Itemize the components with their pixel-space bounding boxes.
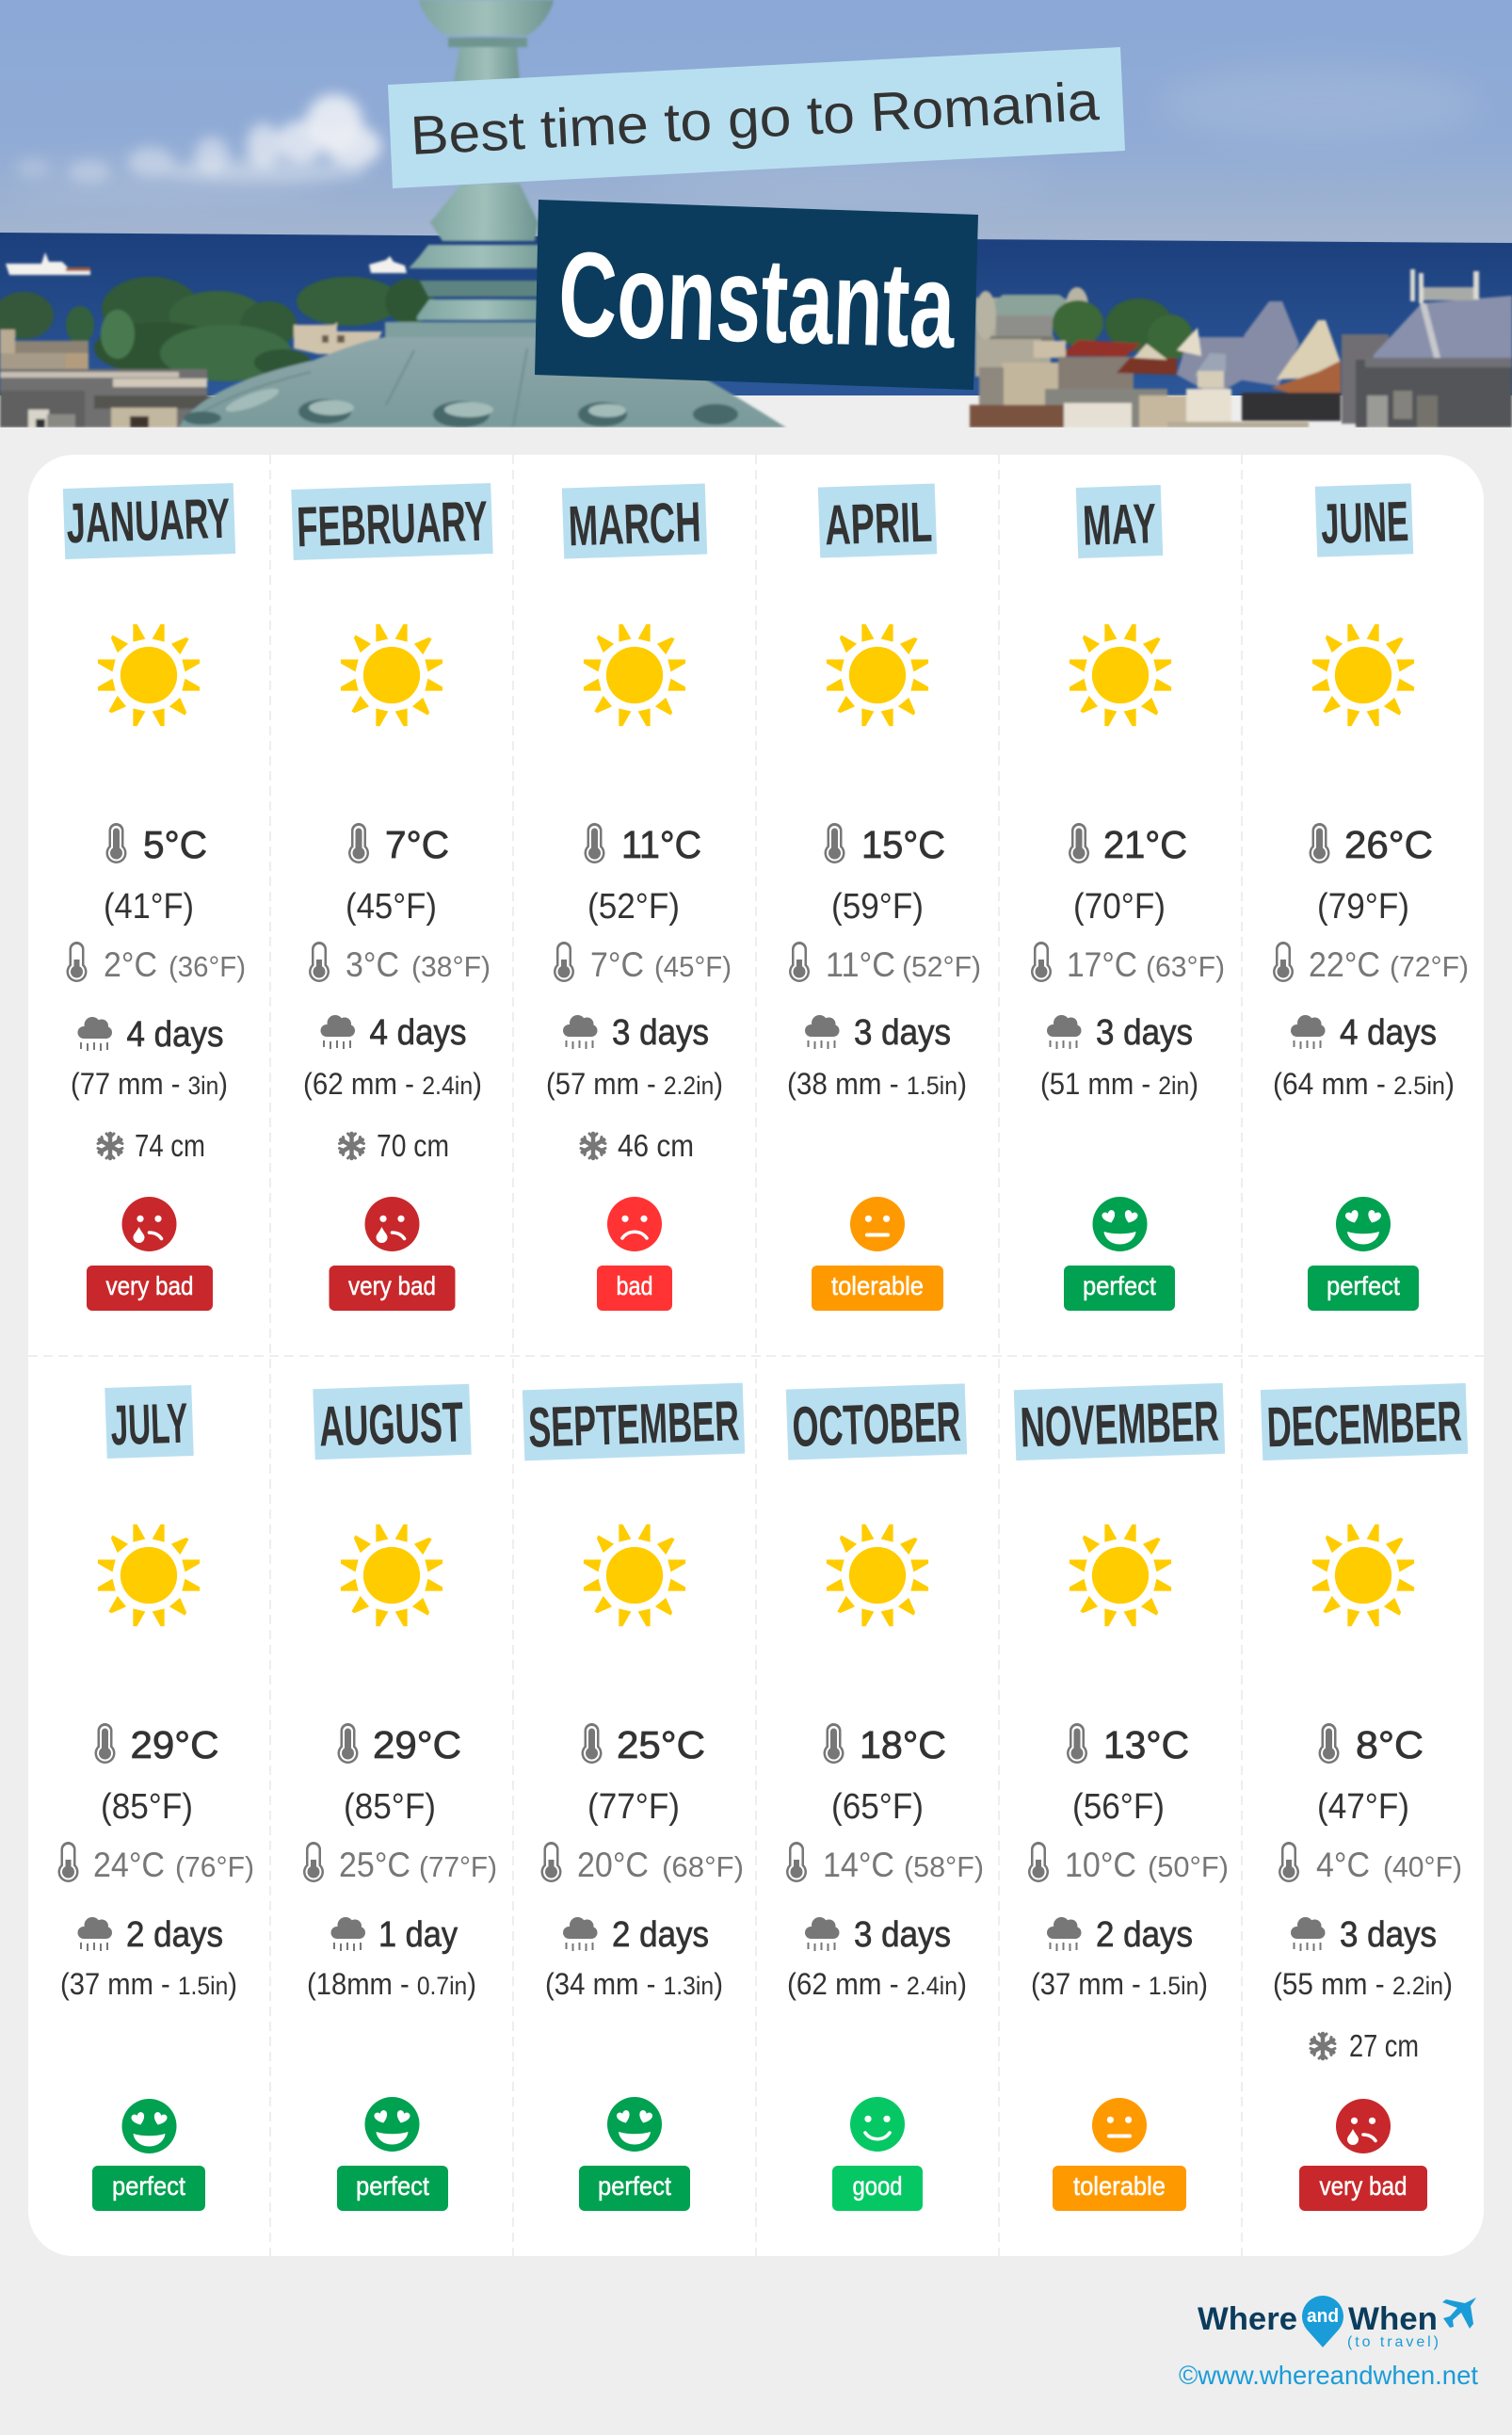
rating badge: perfect — [1064, 1266, 1175, 1311]
icon: sun — [827, 1524, 928, 1626]
month label: March: MARCH — [568, 491, 702, 557]
month label: January — [63, 483, 235, 559]
month label: April: APRIL — [824, 491, 933, 556]
icon: rain cloud — [805, 1015, 840, 1049]
rating face: very bad — [365, 1197, 420, 1251]
high temperature Fahrenheit: (56°F) — [1072, 1787, 1165, 1827]
icon: sun — [584, 624, 685, 726]
icon: thermometer low — [1279, 1842, 1299, 1882]
icon: thermometer high — [1309, 823, 1329, 863]
icon: map pin — [1302, 2296, 1343, 2347]
rainfall: (64 mm - 2.5in) — [1273, 1067, 1455, 1101]
rainfall: (37 mm - 1.5in) — [1031, 1967, 1208, 2001]
rating badge: tolerable: tolerable — [831, 1271, 924, 1300]
low temperature Fahrenheit: (45°F) — [654, 950, 732, 983]
high temperature Fahrenheit: (79°F) — [1317, 887, 1409, 927]
rating badge: very bad: very bad — [105, 1271, 194, 1300]
trees left — [0, 292, 54, 339]
rating face: very bad — [1336, 2099, 1391, 2153]
rating badge: very bad — [87, 1266, 213, 1311]
rainfall: (38 mm - 1.5in) — [787, 1067, 967, 1101]
icon: snowflake — [98, 1134, 122, 1158]
low temperature: 3°C — [346, 945, 399, 984]
rating badge: bad — [597, 1266, 672, 1311]
icon: thermometer high — [105, 823, 126, 863]
rating badge: perfect: perfect — [598, 2171, 671, 2201]
rainfall: (62 mm - 2.4in) — [787, 1967, 967, 2001]
rating badge: perfect: perfect — [1083, 1271, 1156, 1300]
rainfall: (55 mm - 2.2in) — [1273, 1967, 1453, 2001]
rainfall: (51 mm - 2in) — [1040, 1067, 1198, 1101]
city banner: Constanta: Constanta — [556, 227, 957, 374]
low temperature Fahrenheit: (72°F) — [1390, 950, 1469, 983]
rating badge: tolerable — [812, 1266, 943, 1311]
panel: December — [1261, 1383, 1468, 2211]
panel: October — [786, 1383, 984, 2211]
low temperature: 11°C — [826, 945, 895, 984]
icon: snowflake — [1311, 2034, 1335, 2058]
month label: March — [562, 484, 707, 558]
rating badge: perfect — [92, 2166, 205, 2211]
rainy days: 4 days — [369, 1013, 467, 1053]
icon: thermometer high — [1318, 1723, 1339, 1764]
rainy days: 3 days — [854, 1013, 951, 1053]
rating badge: perfect: perfect — [356, 2171, 429, 2201]
low temperature Fahrenheit: (40°F) — [1383, 1850, 1462, 1883]
high temperature Fahrenheit: (41°F) — [104, 887, 194, 927]
high temperature: 29°C — [130, 1723, 218, 1766]
panel: September — [523, 1383, 745, 2211]
rating badge: tolerable: tolerable — [1073, 2171, 1166, 2201]
snowfall: 46 cm — [618, 1128, 694, 1163]
high temperature Fahrenheit: (85°F) — [101, 1787, 193, 1827]
dome and spire — [179, 337, 786, 427]
icon: rain cloud — [563, 1917, 597, 1951]
copyright url: ©www.whereandwhen.net — [1179, 2361, 1478, 2390]
rating face: perfect — [1336, 1197, 1391, 1251]
month label: May: MAY — [1082, 492, 1157, 557]
high temperature Fahrenheit: (47°F) — [1317, 1787, 1409, 1827]
icon: sun — [341, 1524, 442, 1626]
high temperature Fahrenheit: (85°F) — [344, 1787, 436, 1827]
icon: sun — [1312, 1524, 1414, 1626]
rating badge: perfect — [1308, 1266, 1419, 1311]
month label: May — [1076, 485, 1163, 558]
rainfall: (57 mm - 2.2in) — [546, 1067, 723, 1101]
panel: January — [63, 483, 246, 1311]
low temperature Fahrenheit: (58°F) — [904, 1850, 984, 1883]
low temperature Fahrenheit: (63°F) — [1146, 950, 1225, 983]
icon: rain cloud — [77, 1917, 112, 1951]
icon: thermometer high — [823, 1723, 844, 1764]
high temperature Fahrenheit: (77°F) — [587, 1787, 680, 1827]
high temperature Fahrenheit: (70°F) — [1073, 887, 1166, 927]
rainy days: 2 days — [612, 1915, 709, 1955]
rating badge: tolerable — [1053, 2166, 1186, 2211]
title banner: Best time to go to Romania — [388, 47, 1125, 188]
city banner: Constanta — [535, 200, 978, 390]
logo: Where and When — [1198, 2296, 1476, 2350]
high temperature: 15°C — [861, 823, 945, 866]
right buildings — [975, 298, 1051, 373]
icon: rain cloud — [320, 1015, 355, 1049]
left buildings — [0, 330, 15, 360]
rainfall: (77 mm - 3in) — [71, 1067, 228, 1101]
high temperature Fahrenheit: (45°F) — [346, 887, 437, 927]
high temperature: 26°C — [1344, 823, 1433, 866]
rainy days: 3 days — [1340, 1915, 1437, 1955]
low temperature: 22°C — [1309, 945, 1380, 984]
icon: rain cloud — [1291, 1917, 1326, 1951]
icon: sun — [584, 1524, 685, 1626]
panel: April — [787, 483, 981, 1311]
month label: August — [313, 1384, 472, 1459]
rating face: very bad — [122, 1197, 177, 1251]
month label: February: FEBRUARY — [296, 490, 489, 558]
month label: February — [291, 483, 493, 560]
rainy days: 1 day — [378, 1915, 458, 1955]
icon: thermometer low — [1028, 1842, 1049, 1882]
rating badge: perfect: perfect — [112, 2171, 185, 2201]
icon: sun — [1312, 624, 1414, 726]
icon: sun — [98, 624, 200, 726]
icon: snowflake — [339, 1134, 363, 1158]
snowfall: 74 cm — [135, 1128, 205, 1163]
icon: rain cloud — [1047, 1015, 1081, 1049]
high temperature: 11°C — [621, 823, 701, 866]
panel: June — [1273, 483, 1469, 1311]
icon: thermometer low — [554, 942, 574, 982]
rainy days: 2 days — [1096, 1915, 1193, 1955]
icon: sun — [341, 624, 442, 726]
month label: November — [1014, 1383, 1225, 1460]
low temperature Fahrenheit: (68°F) — [662, 1850, 744, 1883]
high temperature Fahrenheit: (65°F) — [831, 1787, 924, 1827]
rating badge: perfect — [579, 2166, 690, 2211]
icon: rain cloud — [1047, 1917, 1081, 1951]
icon: snowflake — [581, 1134, 605, 1158]
month label: October: OCTOBER — [792, 1390, 962, 1459]
main white panel — [28, 455, 1484, 2256]
icon: rain cloud — [805, 1917, 840, 1951]
icon: thermometer high — [584, 823, 604, 863]
month label: September: SEPTEMBER — [527, 1389, 740, 1459]
icon: thermometer high — [825, 823, 845, 863]
icon: sun — [827, 624, 928, 726]
icon: sun — [1070, 1524, 1171, 1626]
high temperature: 29°C — [373, 1723, 461, 1766]
month label: June: JUNE — [1320, 490, 1409, 556]
icon: thermometer low — [1273, 942, 1294, 982]
rating face: tolerable — [850, 1197, 905, 1251]
icon: airplane — [1442, 2298, 1476, 2329]
icon: thermometer high — [337, 1723, 358, 1764]
icon: rain cloud — [1291, 1015, 1326, 1049]
header photo: Constanta skyline — [0, 0, 1512, 427]
low temperature Fahrenheit: (50°F) — [1148, 1850, 1229, 1883]
rainfall: (62 mm - 2.4in) — [303, 1067, 482, 1101]
high temperature: 21°C — [1103, 823, 1187, 866]
panel: May — [1031, 485, 1225, 1311]
snowfall: 70 cm — [377, 1128, 449, 1163]
rating badge: perfect: perfect — [1327, 1271, 1400, 1300]
rating face: perfect — [607, 2097, 662, 2152]
low temperature: 7°C — [590, 945, 644, 984]
logo: Where and When: When — [1348, 2301, 1438, 2337]
rainy days: 3 days — [1096, 1013, 1193, 1053]
high temperature: 7°C — [385, 823, 449, 866]
title banner: Best time to go to Romania: Best time to go to Romania — [409, 71, 1101, 167]
icon: rain cloud — [331, 1917, 365, 1951]
rainy days: 3 days — [854, 1915, 951, 1955]
low temperature Fahrenheit: (77°F) — [419, 1850, 497, 1883]
rating face: tolerable — [1092, 2098, 1147, 2153]
icon: thermometer low — [540, 1842, 561, 1882]
icon: thermometer low — [789, 942, 810, 982]
icon: sun — [1070, 624, 1171, 726]
month label: April — [818, 483, 937, 558]
panel: November — [1014, 1383, 1229, 2211]
rating badge: very bad — [1299, 2166, 1427, 2211]
icon: rain cloud — [77, 1017, 112, 1051]
icon: thermometer high — [348, 823, 369, 863]
low temperature: 2°C — [104, 945, 157, 984]
panel: February — [291, 483, 493, 1311]
rating badge: very bad — [330, 1266, 456, 1311]
low temperature: 4°C — [1316, 1846, 1370, 1884]
rainy days: 3 days — [612, 1013, 709, 1053]
rating face: good — [850, 2097, 905, 2152]
rating face: bad — [607, 1197, 662, 1251]
rainfall: (37 mm - 1.5in) — [60, 1967, 237, 2001]
icon: sun — [98, 1524, 200, 1626]
logo: Where and When: (to travel) — [1347, 2334, 1439, 2350]
rating face: perfect — [1092, 1197, 1147, 1251]
month label: January: JANUARY — [65, 487, 232, 555]
month label: November: NOVEMBER — [1020, 1390, 1220, 1459]
rainfall: (18mm - 0.7in) — [307, 1967, 476, 2001]
low temperature Fahrenheit: (36°F) — [169, 950, 246, 983]
rating badge: good — [832, 2166, 923, 2211]
low temperature: 14°C — [823, 1846, 894, 1884]
rating face: perfect — [122, 2099, 177, 2153]
rating badge: very bad: very bad — [348, 1271, 436, 1300]
low temperature Fahrenheit: (38°F) — [411, 950, 491, 983]
icon: thermometer high — [1069, 823, 1089, 863]
rating face: perfect — [365, 2097, 420, 2152]
icon: map pin: and — [1307, 2306, 1339, 2327]
icon: thermometer low — [786, 1842, 807, 1882]
high temperature: 13°C — [1103, 1723, 1189, 1766]
month label: July: JULY — [109, 1392, 189, 1457]
snowfall: 27 cm — [1349, 2028, 1419, 2063]
rating badge: very bad: very bad — [1320, 2171, 1407, 2201]
high temperature: 5°C — [143, 823, 207, 866]
panel: August — [303, 1384, 497, 2211]
month label: October — [786, 1383, 967, 1460]
icon: thermometer low — [58, 1842, 79, 1882]
high temperature: 25°C — [617, 1723, 705, 1766]
high temperature: 8°C — [1356, 1723, 1424, 1766]
rating badge: bad: bad — [616, 1271, 653, 1300]
icon: thermometer low — [1031, 942, 1052, 982]
high temperature: 18°C — [860, 1723, 946, 1766]
icon: thermometer high — [582, 1723, 603, 1764]
low temperature: 25°C — [339, 1846, 410, 1884]
low temperature: 20°C — [577, 1846, 649, 1884]
high temperature Fahrenheit: (59°F) — [831, 887, 924, 927]
rating badge: good: good — [853, 2171, 902, 2201]
low temperature: 24°C — [93, 1846, 165, 1884]
icon: thermometer low — [309, 942, 330, 982]
icon: thermometer high — [1067, 1723, 1087, 1764]
month label: September — [523, 1383, 745, 1460]
low temperature Fahrenheit: (52°F) — [902, 950, 981, 983]
rainy days: 4 days — [126, 1015, 224, 1055]
high temperature Fahrenheit: (52°F) — [587, 887, 680, 927]
month label: June — [1315, 483, 1413, 557]
panel: July — [58, 1385, 254, 2211]
logo: Where and When: Where — [1198, 2301, 1297, 2337]
panel: March — [546, 484, 732, 1311]
rainy days: 4 days — [1340, 1013, 1437, 1053]
icon: thermometer high — [94, 1723, 115, 1764]
low temperature Fahrenheit: (76°F) — [175, 1850, 254, 1883]
month label: July — [105, 1385, 194, 1459]
icon: thermometer low — [303, 1842, 324, 1882]
low temperature: 10°C — [1065, 1846, 1136, 1884]
rating badge: perfect — [337, 2166, 448, 2211]
rainfall: (34 mm - 1.3in) — [545, 1967, 723, 2001]
icon: rain cloud — [563, 1015, 597, 1049]
month label: August: AUGUST — [318, 1391, 464, 1459]
low temperature: 17°C — [1067, 945, 1137, 984]
rainy days: 2 days — [126, 1915, 223, 1955]
icon: thermometer low — [66, 942, 87, 982]
